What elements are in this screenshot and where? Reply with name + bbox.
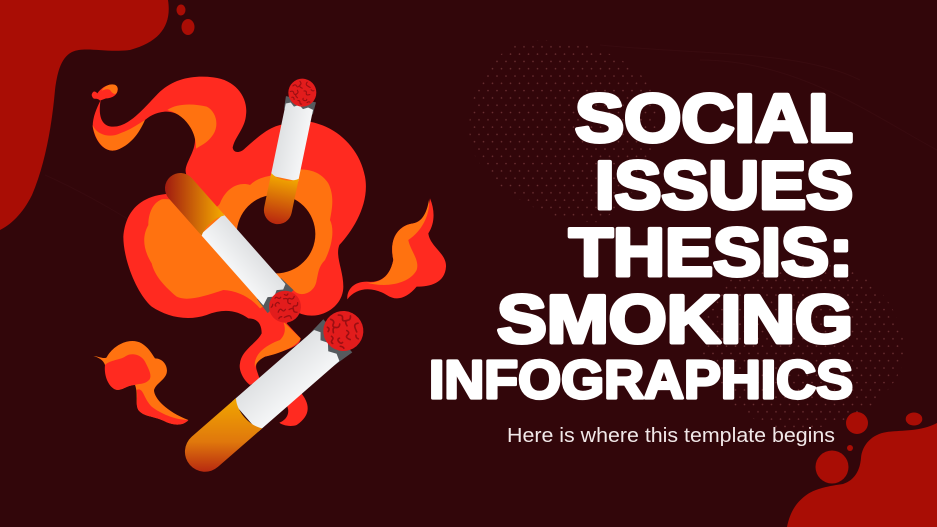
blob: bottom-right: [787, 412, 937, 527]
smoke gap: [257, 360, 278, 376]
halftone dots lower: [700, 259, 905, 430]
title: SOCIAL: [575, 80, 853, 156]
smoke: orange layer: [93, 84, 332, 368]
cigarette: top: [260, 76, 320, 227]
halftone dots upper: [469, 40, 657, 222]
faint contour lines: [45, 45, 937, 245]
cigarette: middle: [157, 165, 309, 330]
blob droplets: top-left: [176, 4, 194, 35]
cigarette: bottom: [175, 301, 373, 481]
title: INFOGRAPHICS: [429, 350, 853, 410]
title: SMOKING: [497, 282, 853, 358]
illustration: cigarettes and smoke: [92, 76, 446, 481]
smoke: main cloud: [92, 77, 366, 426]
title: ISSUES: [595, 148, 853, 224]
blob: top-left: [0, 0, 169, 230]
subtitle: Here is where this template begins: [507, 424, 835, 447]
title: [429, 80, 853, 410]
title: THESIS:: [569, 214, 853, 290]
flame: left: [93, 341, 188, 425]
smoke hole: [237, 195, 315, 273]
flame: right: [347, 198, 446, 299]
